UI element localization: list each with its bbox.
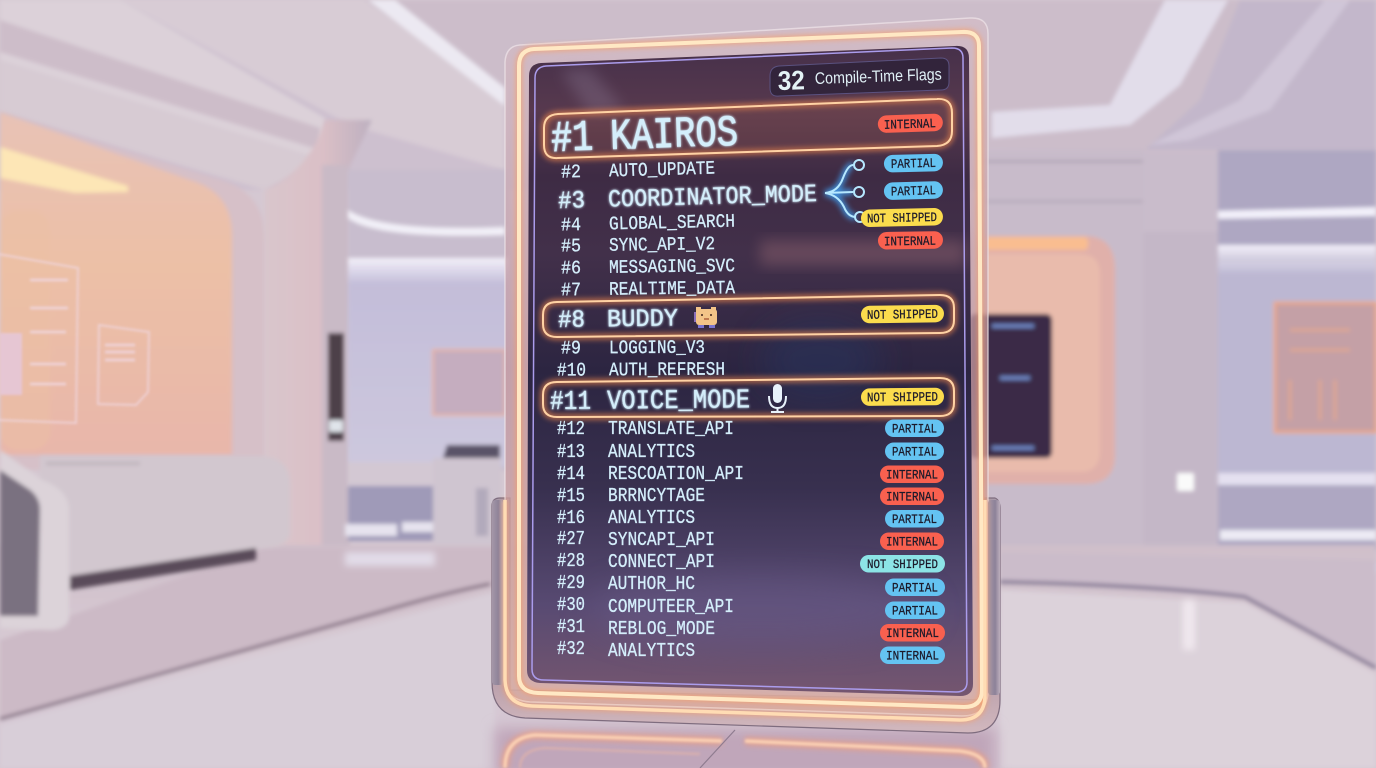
row 30: COMPUTEER_API: PARTIAL [892, 604, 938, 618]
row 10: AUTH_REFRESH [557, 359, 725, 382]
row 28: CONNECT_API: NOT SHIPPED [867, 557, 938, 572]
panel stand [492, 498, 1000, 733]
row 14: RESCOATION_API: INTERNAL [886, 468, 938, 482]
row 15: BRRNCYTAGE: BRRNCYTAGE [608, 485, 705, 507]
row 11: VOICE_MODE: NOT SHIPPED [867, 390, 938, 405]
row 29: AUTHOR_HC: AUTHOR_HC [608, 573, 695, 595]
row 4: GLOBAL_SEARCH: #4 [561, 214, 581, 236]
neon frame glow [505, 32, 985, 720]
ceiling [0, 0, 1376, 190]
row 28: CONNECT_API [557, 550, 945, 573]
row 1: KAIROS: INTERNAL [884, 116, 936, 133]
row 10: AUTH_REFRESH: AUTH_REFRESH [609, 359, 725, 381]
screen [527, 46, 973, 696]
row 11: VOICE_MODE: VOICE_MODE [607, 386, 750, 418]
row 4: GLOBAL_SEARCH [561, 206, 943, 236]
row 6: MESSAGING_SVC: #6 [561, 257, 581, 280]
row 2: AUTO_UPDATE [561, 152, 943, 184]
row 5: SYNC_API_V2: #5 [561, 235, 581, 258]
row 27: SYNCAPI_API [557, 528, 944, 551]
row 5: SYNC_API_V2 [561, 230, 943, 258]
row 7: REALTIME_DATA: REALTIME_DATA [609, 277, 736, 301]
row 30: COMPUTEER_API: COMPUTEER_API [608, 596, 734, 618]
row 30: COMPUTEER_API: #30 [557, 594, 585, 616]
row 31: REBLOG_MODE: REBLOG_MODE [608, 618, 715, 640]
pillar [265, 120, 372, 550]
row 28: CONNECT_API: #28 [557, 550, 585, 572]
row 30: COMPUTEER_API [557, 594, 945, 619]
bench [0, 450, 290, 630]
row 31: REBLOG_MODE: #31 [557, 616, 585, 638]
highlight box: BUDDY [543, 295, 954, 337]
row 13: ANALYTICS [557, 441, 944, 463]
row 1: KAIROS [550, 102, 944, 165]
neon frame [505, 32, 985, 720]
row 15: BRRNCYTAGE [557, 485, 944, 507]
row 4: GLOBAL_SEARCH: GLOBAL_SEARCH [609, 211, 735, 235]
screen border line [532, 48, 967, 692]
holographic panels [0, 254, 149, 423]
row 13: ANALYTICS: PARTIAL [892, 444, 937, 460]
row 2: AUTO_UPDATE: AUTO_UPDATE [609, 158, 715, 182]
row 11: VOICE_MODE [550, 385, 944, 418]
highlight box: KAIROS [544, 99, 952, 158]
row 14: RESCOATION_API [557, 463, 944, 485]
row 9: LOGGING_V3: #9 [561, 337, 581, 359]
floor reflection of the panel [495, 728, 995, 768]
left recess with orange glow [0, 112, 265, 470]
row 32: ANALYTICS: ANALYTICS [608, 640, 695, 662]
row 28: CONNECT_API: CONNECT_API [608, 551, 715, 573]
row 32: ANALYTICS: #32 [557, 638, 585, 660]
display panel [492, 18, 1000, 733]
row 3: COORDINATOR_MODE: COORDINATOR_MODE [608, 180, 817, 215]
row 6: MESSAGING_SVC [561, 255, 735, 280]
flag count badge: 32 [777, 65, 805, 96]
row 8: BUDDY: #8 [558, 306, 585, 335]
row 8: BUDDY [558, 301, 944, 335]
row 27: SYNCAPI_API: #27 [557, 528, 585, 550]
row 9: LOGGING_V3 [561, 337, 705, 359]
flag count badge [770, 58, 949, 96]
highlight box: VOICE_MODE [543, 378, 954, 417]
row 13: ANALYTICS: #13 [557, 441, 585, 463]
row 32: ANALYTICS: INTERNAL [886, 648, 939, 664]
row 15: BRRNCYTAGE: #15 [557, 485, 585, 507]
screen reflections [560, 68, 965, 646]
row 12: TRANSLATE_API [557, 418, 944, 440]
row 3: COORDINATOR_MODE: #3 [558, 186, 585, 216]
row 16: ANALYTICS: PARTIAL [892, 512, 937, 527]
row 2: AUTO_UPDATE: PARTIAL [891, 156, 936, 172]
back room [345, 170, 508, 546]
right wall [970, 150, 1376, 573]
row 1: KAIROS: KAIROS [609, 109, 739, 163]
row 4: GLOBAL_SEARCH: NOT SHIPPED [867, 210, 937, 227]
row 32: ANALYTICS [557, 638, 945, 664]
row 1: KAIROS: #1 [550, 114, 594, 165]
row 13: ANALYTICS: ANALYTICS [608, 441, 695, 463]
row 27: SYNCAPI_API: INTERNAL [886, 534, 938, 550]
row 29: AUTHOR_HC [557, 572, 945, 596]
row 27: SYNCAPI_API: SYNCAPI_API [608, 529, 715, 551]
row 29: AUTHOR_HC: PARTIAL [892, 580, 938, 596]
icon: pixel cat [694, 307, 717, 328]
row 12: TRANSLATE_API: PARTIAL [892, 422, 937, 436]
row 8: BUDDY: BUDDY [607, 304, 678, 334]
row 5: SYNC_API_V2: INTERNAL [884, 234, 936, 249]
row 7: REALTIME_DATA [561, 277, 736, 301]
glass slab [505, 18, 988, 716]
row 3: COORDINATOR_MODE [558, 176, 943, 216]
branch connector icon [825, 160, 865, 222]
row 3: COORDINATOR_MODE: PARTIAL [891, 183, 936, 199]
row 14: RESCOATION_API: #14 [557, 463, 585, 485]
row 2: AUTO_UPDATE: #2 [561, 161, 581, 184]
row 10: AUTH_REFRESH: #10 [557, 359, 586, 382]
row 16: ANALYTICS [557, 507, 944, 529]
stand legs [492, 500, 1000, 695]
row 6: MESSAGING_SVC: MESSAGING_SVC [609, 255, 735, 279]
floor [0, 545, 1376, 768]
row 5: SYNC_API_V2: SYNC_API_V2 [609, 233, 715, 257]
row 11: VOICE_MODE: #11 [550, 388, 591, 418]
row 7: REALTIME_DATA: #7 [561, 279, 581, 301]
icon: microphone [769, 384, 786, 412]
flag count badge: Compile-Time Flags [815, 66, 942, 88]
row 12: TRANSLATE_API: #12 [557, 418, 585, 440]
row 12: TRANSLATE_API: TRANSLATE_API [608, 418, 734, 440]
row 9: LOGGING_V3: LOGGING_V3 [609, 337, 705, 359]
row 31: REBLOG_MODE: INTERNAL [886, 626, 939, 641]
row 8: BUDDY: NOT SHIPPED [867, 307, 938, 323]
row 16: ANALYTICS: #16 [557, 507, 585, 529]
row 16: ANALYTICS: ANALYTICS [608, 507, 695, 529]
row 15: BRRNCYTAGE: INTERNAL [886, 490, 938, 504]
row 31: REBLOG_MODE [557, 616, 945, 642]
row 29: AUTHOR_HC: #29 [557, 572, 585, 594]
row 14: RESCOATION_API: RESCOATION_API [608, 463, 744, 485]
